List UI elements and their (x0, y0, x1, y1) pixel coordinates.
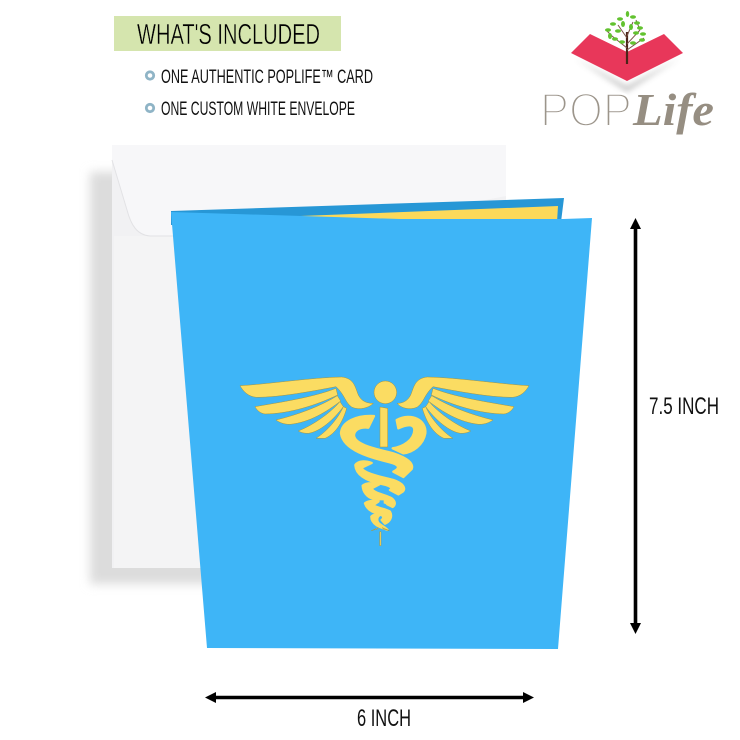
snake upper right (393, 417, 425, 453)
caduceus cut-out (240, 377, 529, 546)
snake coil 2 (363, 483, 395, 507)
list item: card: ONE AUTHENTIC POPLIFE™ CARD (161, 67, 373, 88)
snake upper left (341, 416, 412, 477)
card yellow inner (300, 206, 558, 222)
right wing (397, 377, 529, 438)
logo shadow (575, 58, 680, 92)
heading: what's included (114, 16, 341, 51)
snake tail (371, 515, 387, 530)
logo tree (605, 11, 646, 64)
card front panel (171, 212, 592, 649)
envelope flap (112, 145, 506, 236)
snake coil 3 (365, 501, 391, 524)
heading: what's included: WHAT'S INCLUDED (137, 19, 320, 51)
envelope shadow (90, 172, 220, 584)
width arrow (205, 692, 534, 703)
width label: 6 INCH (357, 705, 411, 732)
snake body (341, 416, 425, 530)
logo wordmark POP: POP (540, 83, 632, 136)
envelope (90, 145, 506, 584)
list item: envelope: ONE CUSTOM WHITE ENVELOPE (161, 99, 355, 120)
bullet: envelope (146, 104, 154, 112)
card back panel (171, 198, 564, 225)
envelope inner pocket (114, 236, 204, 568)
logo red open book (571, 34, 683, 81)
left wing (240, 377, 373, 438)
included items list (146, 67, 373, 120)
staff squares (380, 464, 385, 503)
height arrow (630, 218, 641, 634)
logo: PopLife (540, 11, 714, 136)
staff ball (374, 381, 397, 404)
snake coil 1 (355, 461, 404, 494)
greeting card (171, 198, 592, 649)
staff (380, 407, 388, 447)
logo wordmark Life: Life (632, 85, 714, 135)
staff tip (371, 528, 389, 546)
envelope body (112, 145, 506, 568)
bullet: authentic card (146, 72, 154, 79)
